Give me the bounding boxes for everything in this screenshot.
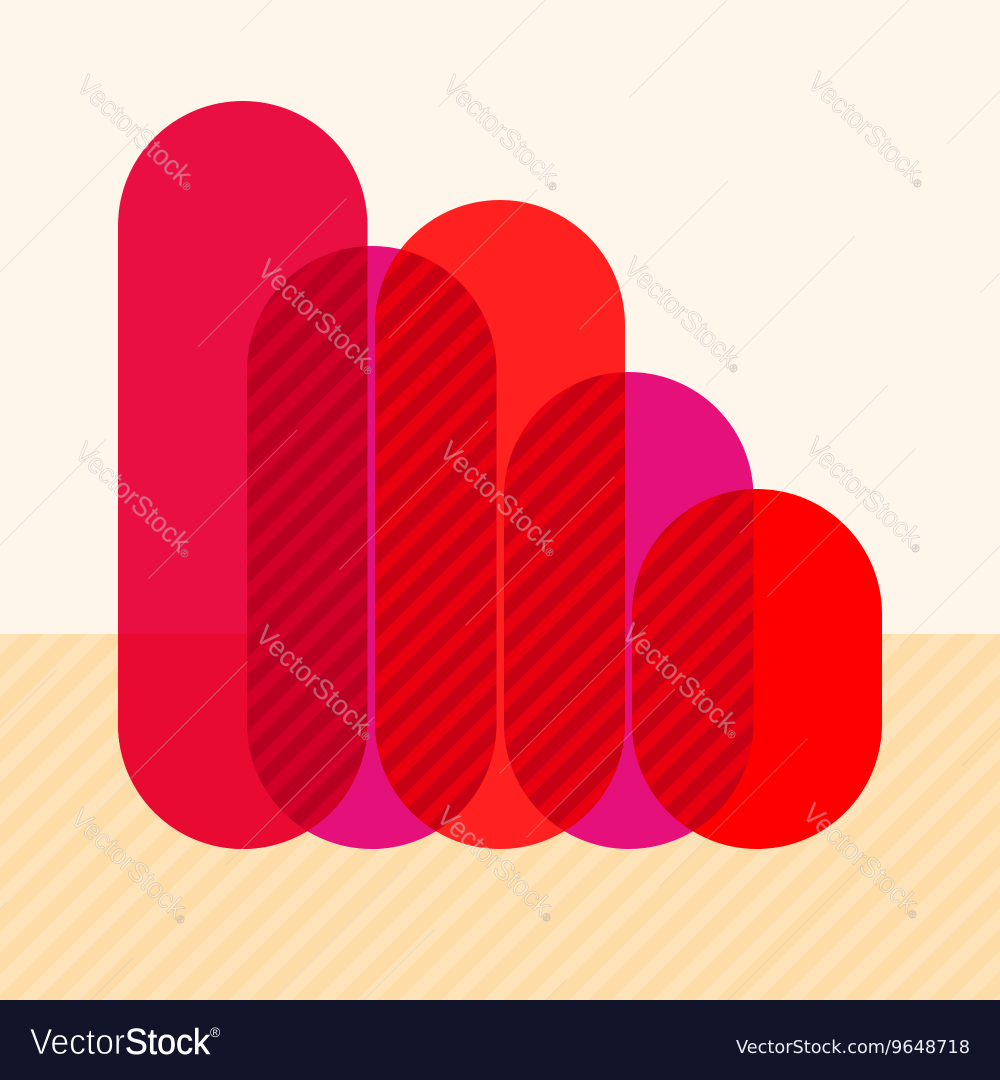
- footer image id: VectorStock.com/9648718: [736, 1037, 970, 1058]
- watermark stamps: VectorStock®: [65, 802, 198, 929]
- bar 3: [375, 200, 625, 849]
- striped floor: [0, 634, 1000, 1000]
- footer logo: ®: [210, 1024, 221, 1040]
- footer bar: [0, 1000, 1000, 1080]
- watermark stamps: VectorStock®: [797, 797, 930, 924]
- background wall: [0, 0, 1000, 634]
- footer logo: Vector: [30, 1021, 125, 1062]
- chart: overlapping pill bars: [118, 101, 882, 849]
- watermark stamps: VectorStock®: [800, 431, 933, 558]
- watermark stamps: VectorStock®: [437, 69, 570, 196]
- watermark stamps: VectorStock®: [434, 435, 567, 562]
- bar 5: [632, 489, 882, 849]
- watermark stamps: VectorStock®: [71, 69, 204, 196]
- overlap: bars 2 and 3: [375, 249, 496, 832]
- bar 1: [118, 101, 368, 849]
- watermark stamps: [65, 66, 935, 929]
- overlap: bars 3 and 4: [504, 372, 625, 831]
- watermark stamps: VectorStock®: [431, 800, 564, 927]
- watermark stamps: VectorStock®: [250, 619, 383, 746]
- watermark stamps: VectorStock®: [618, 251, 751, 378]
- overlap: bars 4 and 5: [632, 489, 754, 832]
- watermark stamps: VectorStock®: [252, 253, 385, 380]
- watermark stamps: VectorStock®: [802, 66, 935, 193]
- watermark stamps: VectorStock®: [69, 436, 202, 563]
- watermark stamps: VectorStock®: [616, 617, 749, 744]
- footer logo: [30, 1021, 221, 1062]
- bar 2: [247, 246, 496, 849]
- footer logo: Stock: [125, 1021, 211, 1062]
- bar 4: [504, 372, 754, 849]
- overlap: bars 1 and 2: [247, 246, 368, 831]
